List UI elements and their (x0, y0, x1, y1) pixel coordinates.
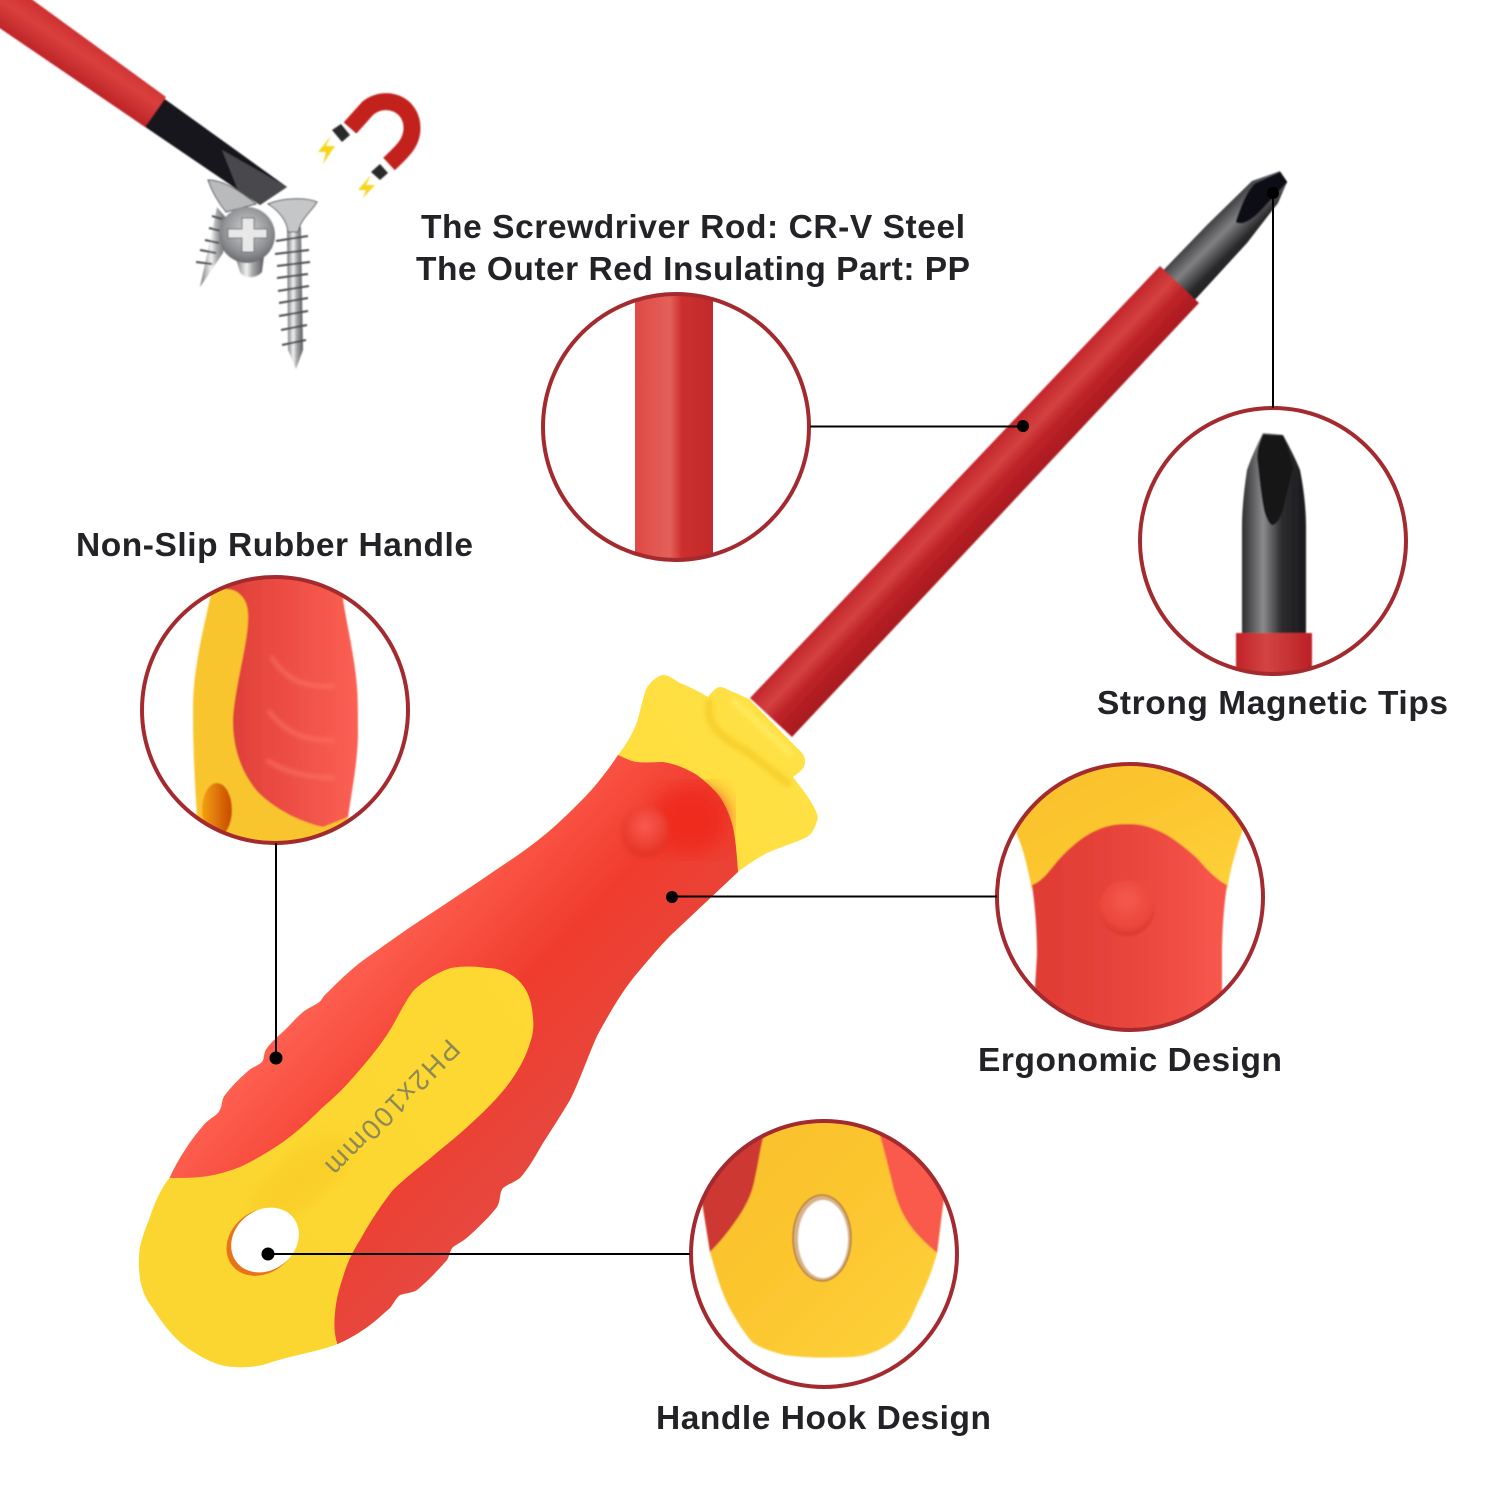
hook hole rim (793, 1195, 851, 1281)
tip flute (1236, 172, 1287, 223)
grip lens ring (142, 577, 408, 843)
yellow side (193, 575, 348, 860)
deep red highlight (652, 786, 728, 854)
hole rim (213, 1194, 311, 1290)
tip flute (1257, 434, 1293, 525)
rod marker (1017, 420, 1029, 432)
hook hole (798, 1200, 848, 1278)
line: insulation material: The Outer Red Insulating Part: PP (416, 251, 970, 288)
rod leader line (810, 426, 1023, 428)
spark bottom (358, 175, 375, 198)
red collar (1234, 632, 1314, 672)
tip body (1242, 433, 1306, 640)
ergonomic leader line (672, 896, 997, 898)
label: ergonomic design: Ergonomic Design (978, 1042, 1282, 1079)
ergonomic lens image (1016, 766, 1244, 1028)
screws (196, 180, 317, 369)
grip ribs (266, 656, 335, 778)
thumb bump (623, 808, 668, 856)
size marking: PH2x100mm (319, 1033, 466, 1182)
callout: magnetic tip detail (1140, 187, 1406, 683)
callout: ergonomic detail (666, 760, 1263, 1040)
slotted screwdriver tip picking up screws (0, 0, 317, 369)
red left (702, 1138, 764, 1252)
ergonomic lens ring (997, 764, 1263, 1030)
black phillips tip (1150, 171, 1287, 316)
heading: material (416, 209, 970, 288)
red shaft (750, 266, 1199, 737)
right countersunk screw (268, 199, 317, 369)
yellow body (130, 660, 830, 1380)
ergonomic marker (666, 891, 678, 903)
blade facet (222, 150, 287, 205)
tip leader line (1272, 193, 1274, 408)
yellow lower shade (262, 1148, 338, 1210)
magnet pole south (371, 164, 388, 180)
line: rod material: The Screwdriver Rod: CR-V Steel (421, 209, 965, 246)
magnet pole north (332, 124, 350, 142)
hook leader line (268, 1253, 690, 1255)
rod lens ring (543, 294, 809, 560)
red body (1031, 823, 1228, 1028)
lanyard hole (202, 783, 232, 837)
red grip (224, 579, 359, 828)
label: handle hook design: Handle Hook Design (656, 1400, 991, 1437)
grip lens image (193, 570, 358, 860)
callout: hook detail (262, 1120, 957, 1387)
rod lens image (635, 290, 713, 564)
yellow collar (1016, 766, 1244, 891)
red insulated rod (0, 0, 166, 127)
left countersunk screw (196, 180, 256, 287)
handle (130, 660, 830, 1390)
callout: rubber grip detail (142, 570, 408, 1064)
collar lip (733, 700, 792, 755)
hole opening (218, 1194, 312, 1286)
magnet body (350, 102, 412, 164)
collar ridge shading (709, 700, 790, 785)
spark top (318, 136, 335, 164)
hook lens ring (691, 1121, 957, 1387)
tip lens image (1236, 433, 1312, 683)
red right (880, 1136, 944, 1254)
yellow end cap (702, 1120, 943, 1358)
main screwdriver (130, 171, 1287, 1390)
hook marker (262, 1248, 274, 1260)
callout: rod detail (543, 290, 1029, 564)
grip leader line (275, 843, 277, 1058)
tip lens ring (1140, 408, 1406, 674)
red grip (170, 755, 738, 1344)
pan head screw (219, 207, 275, 277)
tip marker (1267, 187, 1279, 199)
hook lens image (695, 1120, 950, 1358)
hook hole (213, 1194, 312, 1290)
label: non-slip handle: Non-Slip Rubber Handle (76, 527, 473, 564)
label: strong magnetic tips: Strong Magnetic Tips (1097, 685, 1448, 722)
thumb bump (1106, 884, 1152, 936)
black shaft and blade (135, 92, 287, 205)
grip marker (270, 1052, 282, 1064)
icon: magnet (318, 102, 412, 198)
